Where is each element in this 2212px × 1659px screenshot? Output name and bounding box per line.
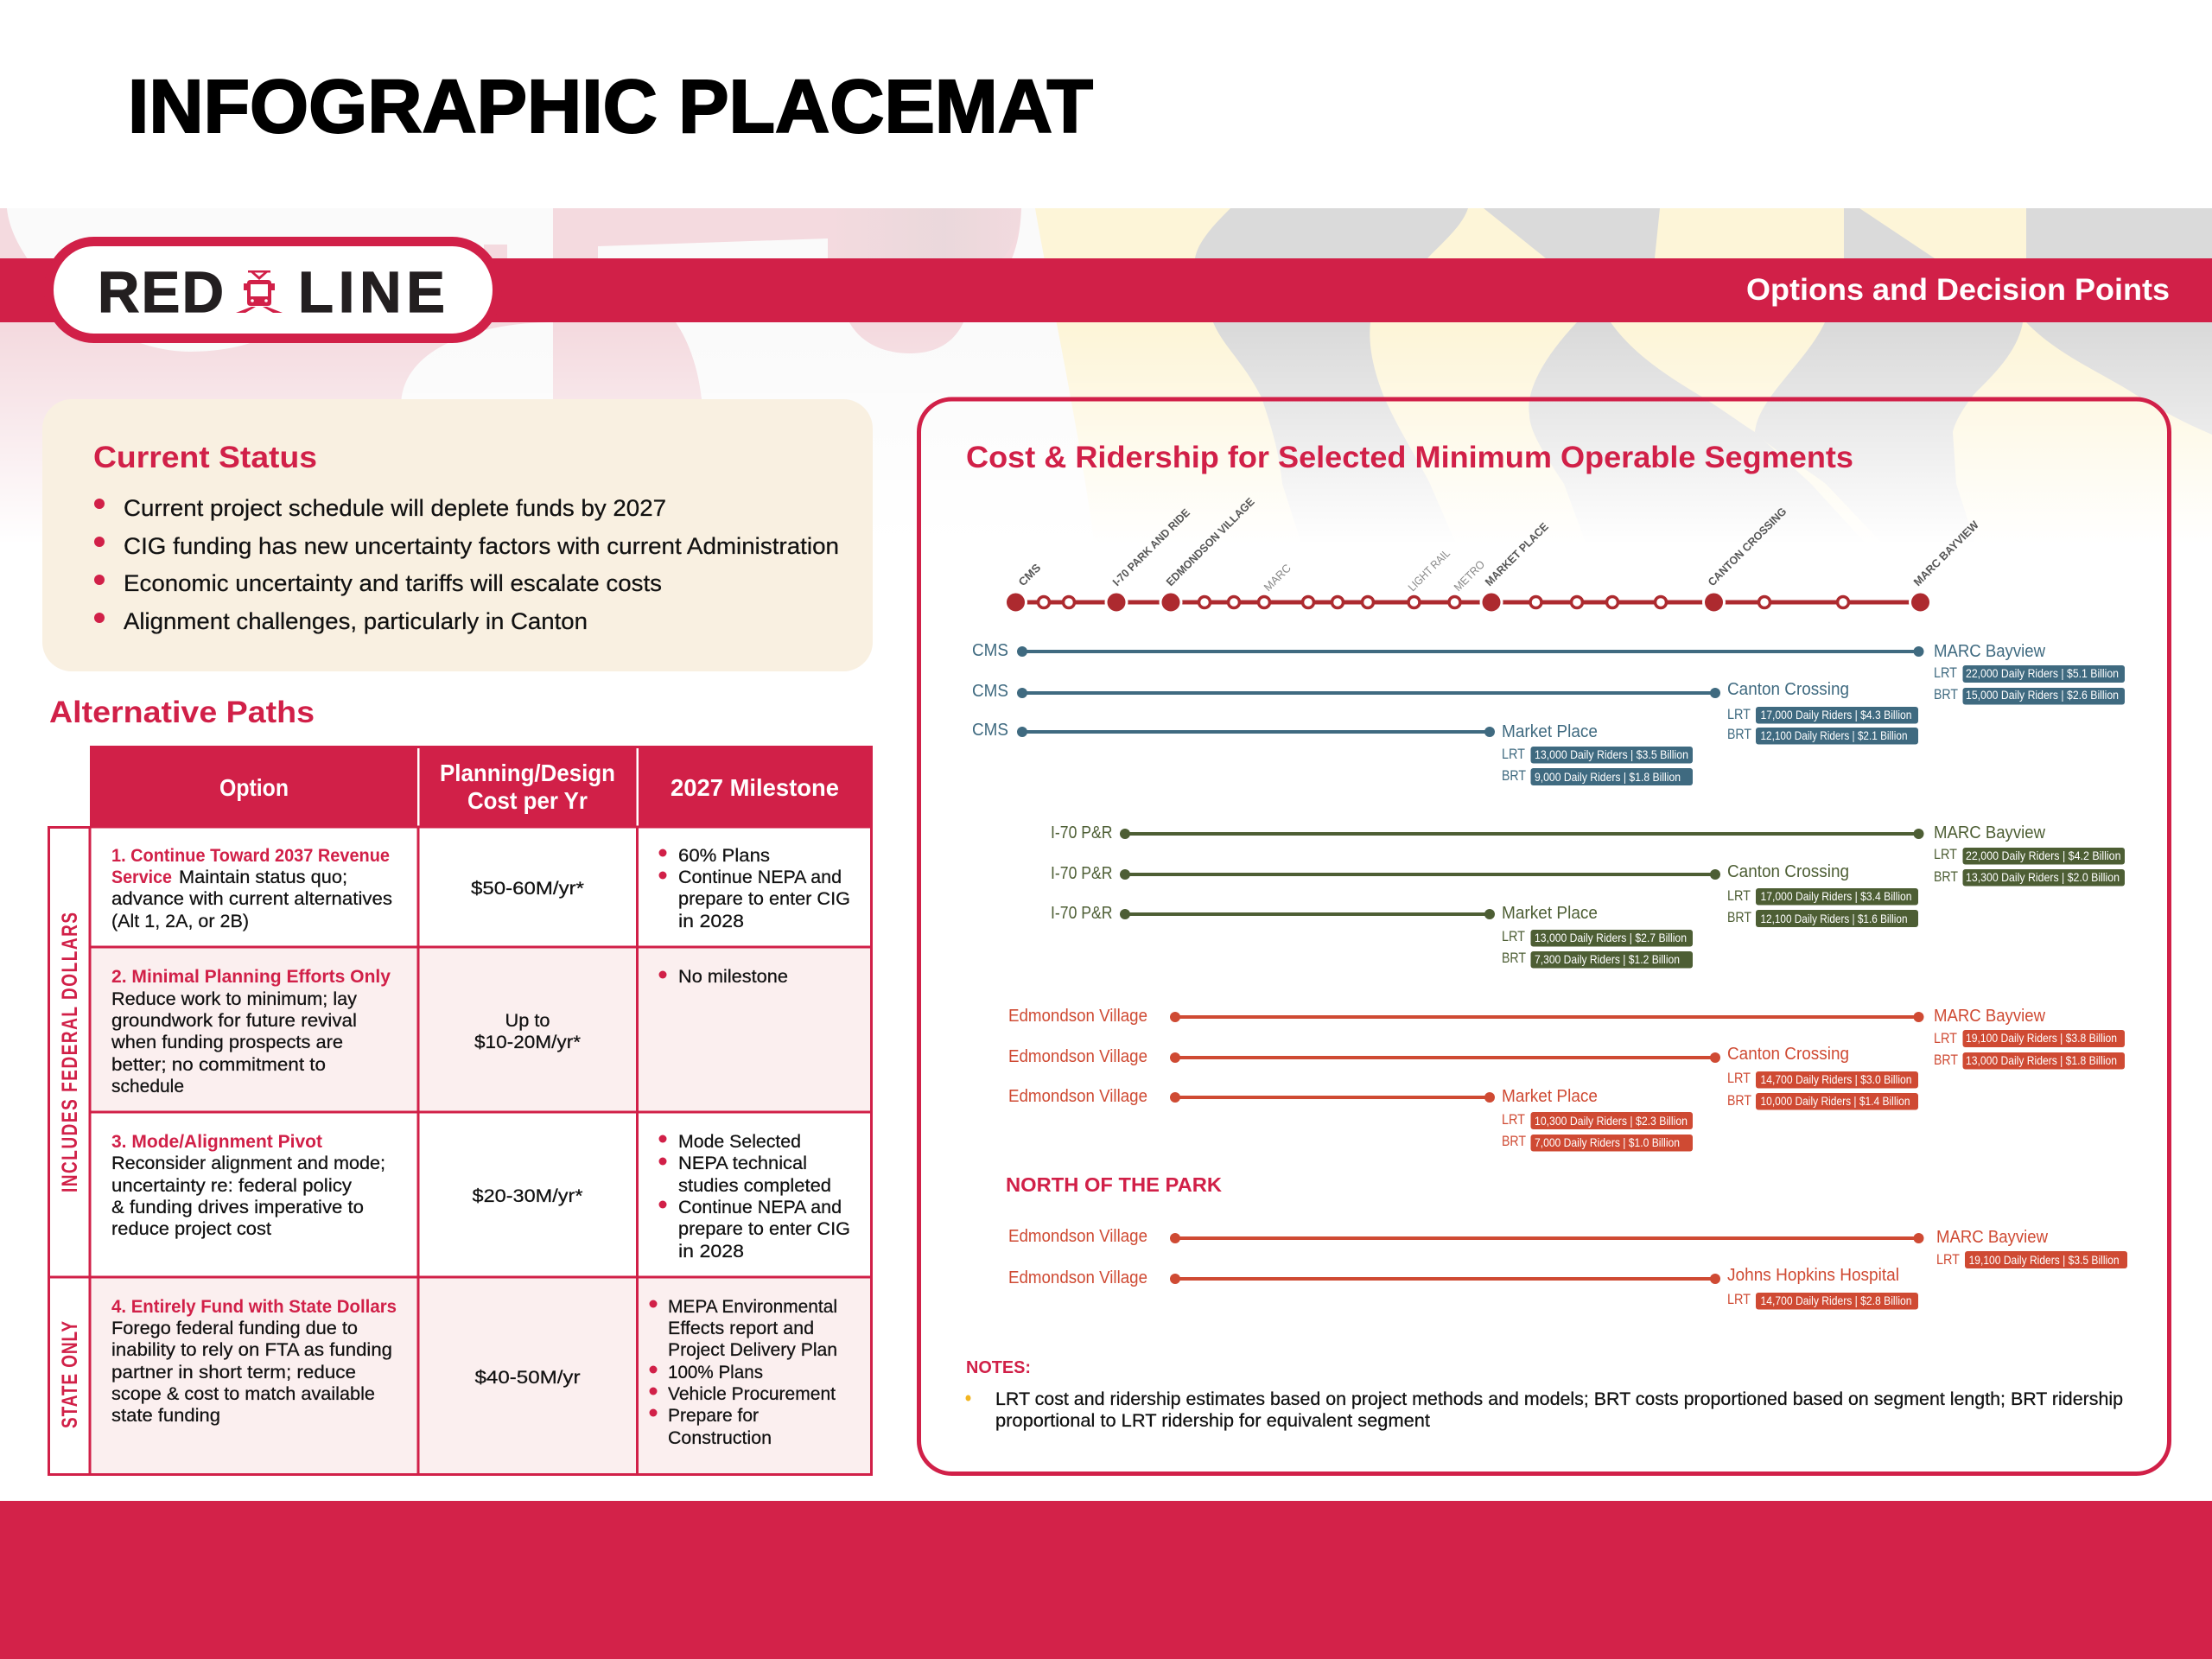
- option 2: better; no commitment to: [111, 1054, 326, 1075]
- segment group: CMS: BRT: [1934, 686, 1958, 702]
- option 4: MEPA Environmental: [668, 1296, 837, 1317]
- option 4: Vehicle Procurement: [668, 1383, 836, 1404]
- option 3: uncertainty re: federal policy: [111, 1175, 352, 1196]
- subtitle: options and decision points: Options and Decision Points: [1746, 273, 2170, 307]
- segment group: CMS: CMS: [972, 721, 1008, 740]
- option 3: Mode Selected: [678, 1131, 801, 1152]
- segment group: I-70 P&R: LRT: [1502, 928, 1525, 944]
- segment group: CMS: LRT: [1727, 706, 1751, 722]
- segment group: north of the park: 14,700 Daily Riders | $2.8 Billion: [1761, 1294, 1911, 1307]
- option 2: Reduce work to minimum; lay: [111, 988, 357, 1009]
- heading: north of the park: NORTH OF THE PARK: [1006, 1173, 1222, 1196]
- heading: cost and ridership: Cost & Ridership for Selected Minimum Operable Segments: [966, 441, 1853, 474]
- header band: [0, 258, 2212, 322]
- segment group: CMS: 9,000 Daily Riders | $1.8 Billion: [1535, 770, 1681, 784]
- option 4: [111, 1296, 837, 1448]
- segment group: CMS: CMS: [972, 682, 1008, 701]
- route diagram: red line stations: METRO: [1452, 557, 1487, 594]
- option 4: Effects report and: [668, 1318, 814, 1338]
- option 2: 2. Minimal Planning Efforts Only: [111, 966, 391, 987]
- segment group: north of the park: Johns Hopkins Hospital: [1727, 1266, 1899, 1285]
- segment group: I-70 P&R: 22,000 Daily Riders | $4.2 Billion: [1966, 849, 2120, 862]
- option 3: Reconsider alignment and mode;: [111, 1153, 385, 1173]
- segment group: Edmondson Village: Edmondson Village: [1008, 1047, 1147, 1066]
- logo: red line: [48, 242, 498, 339]
- route diagram: red line stations: [1006, 495, 1981, 613]
- option 2: [111, 966, 788, 1096]
- notes: NOTES:: [966, 1358, 1031, 1377]
- segment group: I-70 P&R: 13,000 Daily Riders | $2.7 Billion: [1535, 931, 1687, 944]
- segment group: CMS: 17,000 Daily Riders | $4.3 Billion: [1761, 708, 1911, 721]
- segment group: CMS: 12,100 Daily Riders | $2.1 Billion: [1761, 728, 1908, 742]
- segment group: I-70 P&R: LRT: [1934, 846, 1957, 862]
- option 1: (Alt 1, 2A, or 2B): [111, 911, 249, 931]
- segment group: north of the park: Edmondson Village: [1008, 1227, 1147, 1246]
- background flag pattern: [0, 208, 2212, 499]
- segment group: I-70 P&R: Market Place: [1502, 904, 1598, 923]
- segment group: CMS: MARC Bayview: [1934, 642, 2046, 661]
- route diagram: red line stations: EDMONDSON VILLAGE: [1164, 495, 1257, 588]
- segment group: Edmondson Village: [1008, 1007, 2125, 1151]
- segment group: north of the park: Edmondson Village: [1008, 1268, 1147, 1287]
- route diagram: red line stations: MARC: [1262, 562, 1294, 594]
- option 2: No milestone: [678, 966, 788, 987]
- group label: state only: STATE ONLY: [58, 1321, 82, 1428]
- segment group: Edmondson Village: 14,700 Daily Riders | $3.0 Billion: [1761, 1072, 1911, 1086]
- segment group: Edmondson Village: 7,000 Daily Riders | $1.0 Billion: [1535, 1135, 1680, 1149]
- segment group: Edmondson Village: 19,100 Daily Riders | $3.8 Billion: [1966, 1031, 2117, 1045]
- route diagram: red line stations: I-70 PARK AND RIDE: [1110, 505, 1192, 588]
- panel: cost and ridership: [919, 399, 2169, 1474]
- route diagram: red line stations: LIGHT RAIL: [1406, 547, 1452, 594]
- option 3: $20-30M/yr*: [472, 1185, 583, 1206]
- segment group: Edmondson Village: Market Place: [1502, 1087, 1598, 1106]
- segment group: Edmondson Village: BRT: [1727, 1092, 1751, 1109]
- option 1: [111, 845, 850, 931]
- segment group: I-70 P&R: BRT: [1727, 909, 1751, 925]
- segment group: CMS: BRT: [1502, 767, 1526, 784]
- title: INFOGRAPHIC PLACEMAT: [128, 65, 1093, 149]
- option 3: [111, 1131, 850, 1262]
- table header: Cost per Yr: [467, 787, 588, 814]
- segment group: Edmondson Village: 10,000 Daily Riders | $1.4 Billion: [1761, 1094, 1910, 1108]
- segment group: Edmondson Village: LRT: [1727, 1070, 1751, 1086]
- segment group: Edmondson Village: LRT: [1502, 1111, 1525, 1128]
- status bullets: Economic uncertainty and tariffs will escalate costs: [124, 570, 662, 596]
- option 3: prepare to enter CIG: [678, 1218, 850, 1239]
- segment group: CMS: LRT: [1934, 664, 1957, 681]
- option 4: Project Delivery Plan: [668, 1339, 837, 1360]
- table grid: [48, 827, 873, 1475]
- heading: alternative paths: Alternative Paths: [49, 696, 315, 729]
- segment group: I-70 P&R: MARC Bayview: [1934, 823, 2046, 842]
- panel: current status: [42, 399, 873, 671]
- table header: Option: [219, 774, 289, 801]
- option 4: state funding: [111, 1405, 220, 1426]
- segment group: north of the park: MARC Bayview: [1936, 1228, 2049, 1247]
- option 2: $10-20M/yr*: [474, 1032, 582, 1052]
- segment group: Edmondson Village: Canton Crossing: [1727, 1045, 1849, 1064]
- option 3: studies completed: [678, 1175, 831, 1196]
- route diagram: red line stations: CANTON CROSSING: [1706, 505, 1789, 588]
- segment group: north of the park: 19,100 Daily Riders | $3.5 Billion: [1969, 1253, 2120, 1267]
- status bullets: Current project schedule will deplete funds by 2027: [124, 495, 666, 521]
- option 1: Maintain status quo;: [179, 867, 347, 887]
- segment group: I-70 P&R: I-70 P&R: [1051, 864, 1113, 883]
- segment group: CMS: 22,000 Daily Riders | $5.1 Billion: [1966, 666, 2119, 680]
- segment group: I-70 P&R: LRT: [1727, 887, 1751, 904]
- segment group: Edmondson Village: Edmondson Village: [1008, 1007, 1147, 1026]
- segment group: CMS: 13,000 Daily Riders | $3.5 Billion: [1535, 747, 1688, 761]
- table: alternative paths: [48, 746, 873, 1475]
- status bullets: CIG funding has new uncertainty factors with current Administration: [124, 533, 839, 559]
- segment group: Edmondson Village: 13,000 Daily Riders | $1.8 Billion: [1966, 1053, 2117, 1067]
- status bullets: [94, 495, 839, 634]
- option 1: advance with current alternatives: [111, 888, 392, 909]
- segment group: I-70 P&R: 17,000 Daily Riders | $3.4 Billion: [1761, 889, 1911, 903]
- option 4: Prepare for: [668, 1405, 759, 1426]
- option 3: Continue NEPA and: [678, 1197, 842, 1217]
- segment group: CMS: [972, 641, 2125, 785]
- option 4: scope & cost to match available: [111, 1383, 375, 1404]
- heading: current status: Current Status: [93, 441, 317, 474]
- segment group: CMS: Market Place: [1502, 722, 1598, 741]
- option 3: NEPA technical: [678, 1153, 807, 1173]
- notes: LRT cost and ridership estimates based on project methods and models; BRT costs proportioned based on segment length; BRT ridership: [995, 1389, 2123, 1409]
- option 2: when funding prospects are: [111, 1032, 343, 1052]
- option 4: 4. Entirely Fund with State Dollars: [111, 1296, 397, 1317]
- option 2: groundwork for future revival: [111, 1010, 357, 1031]
- option 4: Construction: [668, 1427, 772, 1448]
- segment group: CMS: LRT: [1502, 746, 1525, 762]
- option 4: 100% Plans: [668, 1362, 763, 1382]
- segment group: Edmondson Village: LRT: [1934, 1030, 1957, 1046]
- segment group: I-70 P&R: 13,300 Daily Riders | $2.0 Billion: [1966, 870, 2120, 884]
- logo: red line: RED: [98, 260, 224, 325]
- option 3: reduce project cost: [111, 1218, 271, 1239]
- option 2: Up to: [505, 1010, 550, 1031]
- segment group: Edmondson Village: Edmondson Village: [1008, 1087, 1147, 1106]
- option 1: Continue NEPA and: [678, 867, 842, 887]
- segment group: Edmondson Village: BRT: [1934, 1052, 1958, 1068]
- notes: proportional to LRT ridership for equivalent segment: [995, 1411, 1430, 1431]
- status bullets: Alignment challenges, particularly in Canton: [124, 608, 588, 634]
- segment group: I-70 P&R: BRT: [1934, 868, 1958, 885]
- table header: [90, 746, 873, 827]
- segment group: Edmondson Village: 10,300 Daily Riders | $2.3 Billion: [1535, 1114, 1688, 1128]
- option 4: Forego federal funding due to: [111, 1318, 358, 1338]
- logo: red line: LINE: [298, 260, 445, 325]
- route diagram: red line stations: CMS: [1016, 561, 1044, 588]
- icon: light rail train: [236, 270, 283, 313]
- option 1: 60% Plans: [678, 845, 770, 866]
- option 1: 1. Continue Toward 2037 Revenue: [111, 845, 390, 866]
- option 2: schedule: [111, 1076, 184, 1096]
- segment group: I-70 P&R: BRT: [1502, 950, 1526, 966]
- segment group: Edmondson Village: MARC Bayview: [1934, 1007, 2046, 1026]
- option 1: in 2028: [678, 911, 744, 931]
- segment group: CMS: CMS: [972, 641, 1008, 660]
- option 1: prepare to enter CIG: [678, 888, 850, 909]
- segment group: CMS: BRT: [1727, 726, 1751, 742]
- segment group: I-70 P&R: 7,300 Daily Riders | $1.2 Billion: [1535, 952, 1680, 966]
- route diagram: red line stations: MARKET PLACE: [1483, 520, 1551, 588]
- segment group: north of the park: LRT: [1936, 1251, 1960, 1268]
- option 4: $40-50M/yr: [475, 1367, 581, 1388]
- segment group: I-70 P&R: [1051, 823, 2125, 968]
- option 3: in 2028: [678, 1241, 744, 1262]
- option 3: & funding drives imperative to: [111, 1197, 364, 1217]
- segment group: north of the park: [1008, 1227, 2127, 1310]
- segment group: CMS: Canton Crossing: [1727, 680, 1849, 699]
- group label: includes federal dollars: INCLUDES FEDERAL DOLLARS: [58, 912, 82, 1192]
- option 4: partner in short term; reduce: [111, 1362, 356, 1382]
- footer band: [0, 1501, 2212, 1659]
- option 4: inability to rely on FTA as funding: [111, 1339, 392, 1360]
- segment group: Edmondson Village: BRT: [1502, 1133, 1526, 1149]
- segment group: CMS: 15,000 Daily Riders | $2.6 Billion: [1966, 688, 2119, 702]
- segment group: I-70 P&R: 12,100 Daily Riders | $1.6 Billion: [1761, 912, 1908, 925]
- option 1: Service: [111, 867, 172, 887]
- option 1: $50-60M/yr*: [471, 878, 585, 899]
- segment group: I-70 P&R: I-70 P&R: [1051, 823, 1113, 842]
- route diagram: red line stations: MARC BAYVIEW: [1911, 518, 1981, 588]
- segment group: north of the park: LRT: [1727, 1291, 1751, 1307]
- option 3: 3. Mode/Alignment Pivot: [111, 1131, 322, 1152]
- table header: 2027 Milestone: [671, 774, 839, 801]
- segment group: I-70 P&R: I-70 P&R: [1051, 904, 1113, 923]
- segment group: I-70 P&R: Canton Crossing: [1727, 862, 1849, 881]
- table header: Planning/Design: [440, 760, 615, 786]
- notes: [966, 1358, 2123, 1431]
